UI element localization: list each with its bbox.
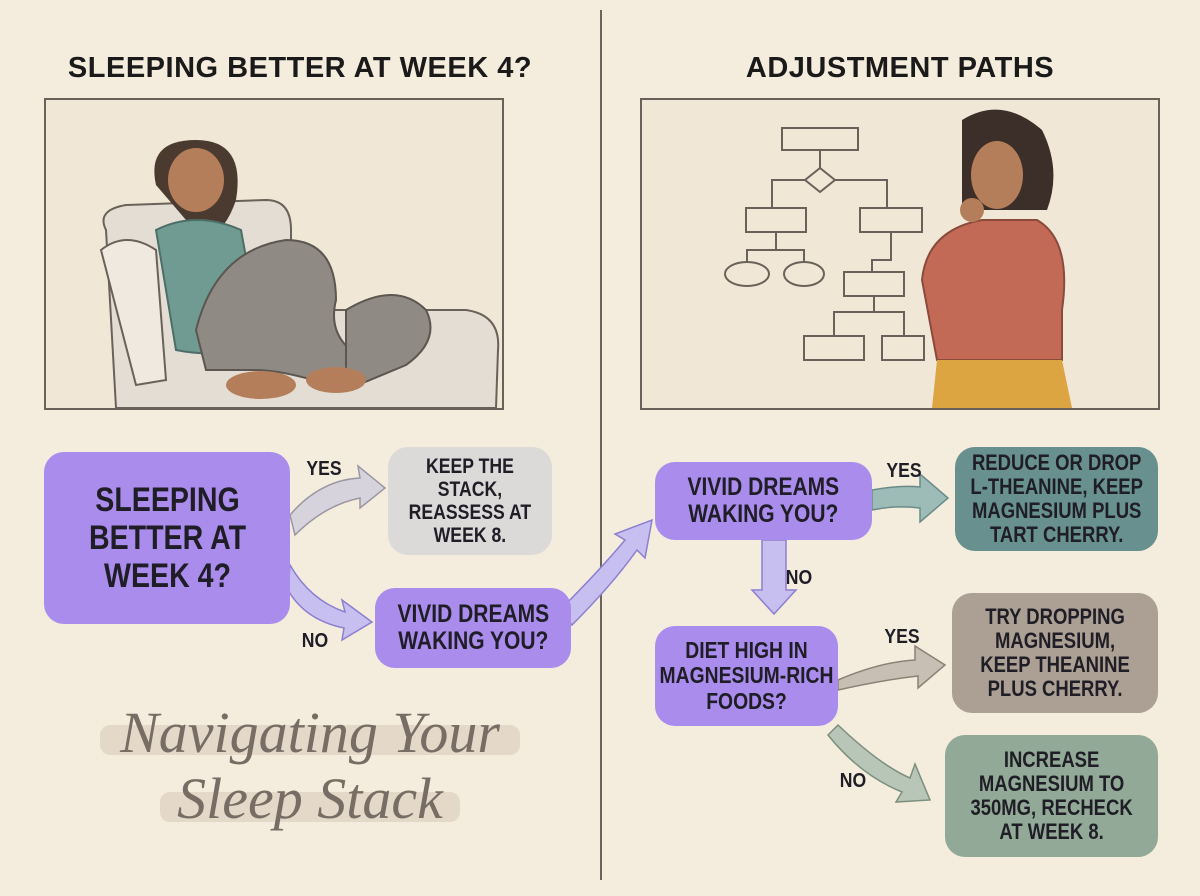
box: try dropping: MAGNESIUM,	[995, 628, 1115, 653]
box: sleeping better	[44, 452, 290, 624]
box: vivid dreams right: VIVID DREAMS	[688, 472, 839, 500]
box: increase magnesium: AT WEEK 8.	[999, 819, 1104, 844]
box: try dropping: KEEP THEANINE	[980, 652, 1130, 677]
box: try dropping	[952, 593, 1158, 713]
box: diet: FOODS?	[706, 688, 787, 714]
box: sleeping better: SLEEPING	[95, 481, 239, 519]
script title: Navigating Your	[120, 700, 500, 765]
box: vivid dreams right	[655, 462, 872, 540]
box: increase magnesium: MAGNESIUM TO	[979, 771, 1124, 796]
label no mid: NO	[786, 567, 812, 589]
box: keep the stack: STACK,	[438, 478, 502, 501]
label no left: NO	[302, 630, 328, 652]
box: reduce theanine: TART CHERRY.	[990, 522, 1123, 547]
box: keep the stack: REASSESS AT	[409, 501, 531, 524]
illustration: woman relaxing on sofa	[44, 98, 504, 410]
box: keep the stack	[388, 447, 552, 555]
box: diet: DIET HIGH IN	[685, 637, 808, 663]
box: reduce theanine: MAGNESIUM PLUS	[972, 498, 1141, 523]
title: right: ADJUSTMENT PATHS	[746, 52, 1054, 84]
box: vivid dreams left: VIVID DREAMS	[397, 600, 549, 628]
box: sleeping better: BETTER AT	[88, 519, 246, 557]
box: vivid dreams left	[375, 588, 571, 668]
box: diet	[655, 626, 838, 726]
script title	[100, 700, 520, 831]
box: increase magnesium	[945, 735, 1158, 857]
script title: Sleep Stack	[177, 766, 443, 831]
label yes left: YES	[306, 458, 342, 480]
box: diet: MAGNESIUM-RICH	[660, 662, 833, 688]
label yes 2: YES	[884, 626, 920, 648]
box: increase magnesium: INCREASE	[1004, 747, 1099, 772]
divider	[600, 10, 602, 880]
box: reduce theanine: L-THEANINE, KEEP	[970, 474, 1143, 499]
box: try dropping: PLUS CHERRY.	[988, 676, 1122, 701]
box: increase magnesium: 350MG, RECHECK	[970, 795, 1133, 820]
box: keep the stack: KEEP THE	[426, 455, 514, 478]
box: reduce theanine	[955, 447, 1158, 551]
box: vivid dreams left: WAKING YOU?	[398, 627, 548, 655]
box: reduce theanine: REDUCE OR DROP	[972, 450, 1141, 475]
box: try dropping: TRY DROPPING	[985, 604, 1125, 629]
box: vivid dreams right: WAKING YOU?	[688, 500, 839, 528]
label no bottom: NO	[840, 770, 866, 792]
illustration: person thinking with flowchart	[640, 98, 1160, 410]
label yes 1: YES	[886, 460, 922, 482]
title: left: SLEEPING BETTER AT WEEK 4?	[68, 52, 532, 84]
box: keep the stack: WEEK 8.	[434, 524, 506, 547]
box: sleeping better: WEEK 4?	[104, 557, 230, 595]
